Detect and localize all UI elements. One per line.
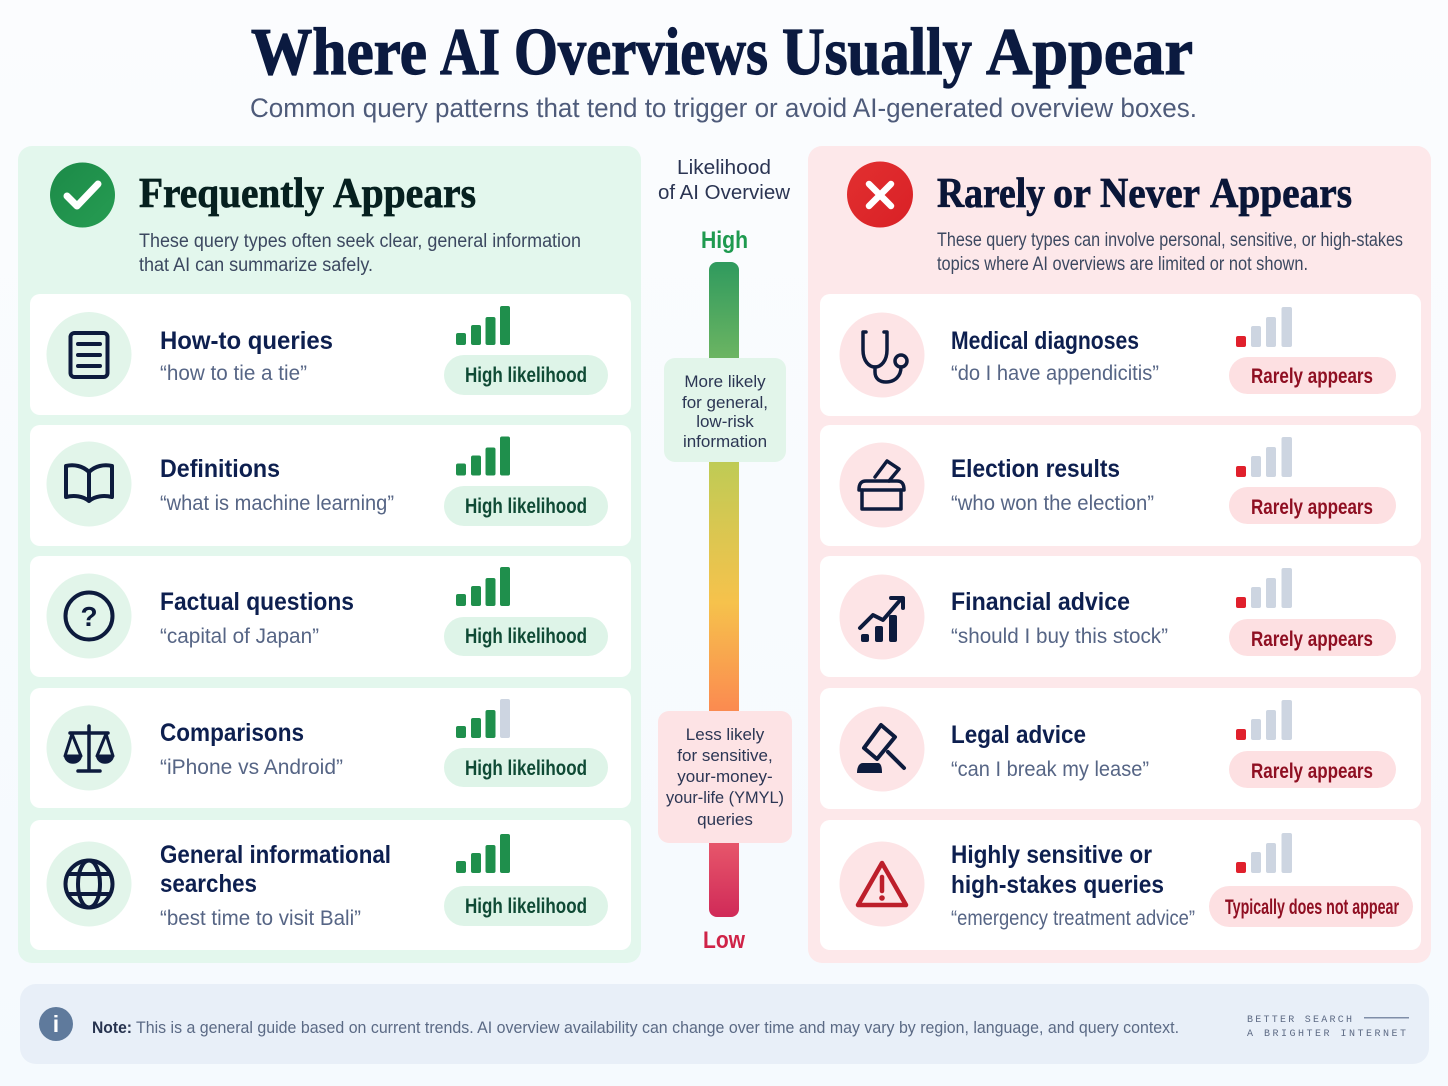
callout: more likely <box>664 358 786 462</box>
likelihood pill <box>1229 487 1396 524</box>
query title: Factual questions <box>160 588 354 616</box>
icon: warning triangle <box>858 863 906 905</box>
panel description: that AI can summarize safely. <box>139 255 373 276</box>
likelihood pill: High likelihood <box>465 625 587 648</box>
signal bars <box>456 834 510 873</box>
icon: open book <box>66 465 112 501</box>
likelihood pill <box>444 355 608 395</box>
card: medical diagnoses <box>820 294 1421 416</box>
panel heading: or <box>1053 171 1091 217</box>
query title <box>951 841 1164 899</box>
query example: “capital of Japan” <box>160 625 319 648</box>
likelihood pill <box>1209 886 1413 927</box>
note text: Note: <box>92 1018 132 1037</box>
card: legal advice <box>820 688 1421 809</box>
query title: Comparisons <box>160 719 304 747</box>
icon: info: i <box>53 1011 59 1037</box>
query title: Medical diagnoses <box>951 327 1139 355</box>
title: Usually <box>782 15 972 89</box>
panel heading: Frequently <box>139 171 324 217</box>
note text: This is a general guide based on current trends. AI overview availability can change over time and may vary by region, language, and query context. <box>136 1018 1179 1037</box>
panel: rarely or never appears <box>808 146 1431 963</box>
query example: “best time to visit Bali” <box>160 907 361 930</box>
icon: gavel <box>857 725 904 773</box>
query example: “do I have appendicitis” <box>951 362 1159 385</box>
icon: globe <box>66 860 112 908</box>
brand mark: A BRIGHTER INTERNET <box>1247 1029 1406 1040</box>
card: financial advice <box>820 556 1421 677</box>
callout: less likely <box>658 711 792 843</box>
query title: searches <box>160 870 257 898</box>
card: highly sensitive queries <box>820 820 1421 950</box>
callout: more likely: More likely <box>684 372 766 391</box>
title: Appear <box>986 15 1193 89</box>
query title: Definitions <box>160 455 280 483</box>
panel heading: Appears <box>1210 171 1352 217</box>
icon: info <box>39 1007 73 1041</box>
brand mark: BETTER SEARCH <box>1247 1015 1352 1026</box>
likelihood pill: Rarely appears <box>1251 496 1373 519</box>
subtitle: Common query patterns that tend to trigger or avoid AI-generated overview boxes. <box>250 93 1197 123</box>
footer note bar <box>20 984 1429 1064</box>
callout: more likely: for general, <box>682 393 768 412</box>
query title: General informational <box>160 841 391 869</box>
signal bars <box>456 306 510 345</box>
card: definitions <box>30 425 631 546</box>
callout: less likely: queries <box>697 810 753 829</box>
likelihood pill <box>444 486 608 526</box>
query title: high-stakes queries <box>951 871 1164 899</box>
scale heading: Likelihood <box>677 157 771 179</box>
icon: ballot box <box>859 461 904 509</box>
signal bars <box>1236 700 1292 740</box>
likelihood pill: Rarely appears <box>1251 760 1373 783</box>
query example: “who won the election” <box>951 492 1154 515</box>
title: AI <box>440 15 500 89</box>
likelihood pill <box>444 617 608 656</box>
card: general informational searches <box>30 820 631 950</box>
panel heading: Appears <box>333 171 476 217</box>
likelihood pill: Rarely appears <box>1251 365 1373 388</box>
callout: less likely: your-money- <box>677 767 773 786</box>
signal bars <box>456 699 510 738</box>
icon: question mark: ? <box>80 601 98 632</box>
query title: How-to queries <box>160 327 333 355</box>
icon: rising chart <box>860 598 903 642</box>
panel description <box>139 231 581 276</box>
icon: stethoscope <box>863 332 907 382</box>
scale heading <box>658 157 791 204</box>
title: Overviews <box>514 15 768 89</box>
likelihood pill <box>1229 751 1396 788</box>
icon: green check badge <box>50 162 115 228</box>
callout: less likely: Less likely <box>686 725 765 744</box>
signal bars <box>1236 833 1292 873</box>
panel: frequently appears <box>18 146 641 963</box>
callout: more likely: low-risk <box>696 412 754 431</box>
callout: less likely: your-life (YMYL) <box>666 788 784 807</box>
likelihood scale <box>658 157 792 954</box>
query title <box>160 841 391 898</box>
low label: Low <box>703 927 745 954</box>
likelihood pill: High likelihood <box>465 895 587 918</box>
panel heading: Never <box>1100 171 1200 217</box>
gradient bar <box>709 262 739 917</box>
query title: Election results <box>951 455 1120 483</box>
card: comparisons <box>30 688 631 808</box>
query example: “should I buy this stock” <box>951 625 1168 648</box>
card: factual questions <box>30 556 631 677</box>
high label: High <box>701 227 748 254</box>
signal bars <box>1236 307 1292 347</box>
likelihood pill <box>444 886 608 926</box>
likelihood pill: High likelihood <box>465 495 587 518</box>
title: Where <box>251 15 427 89</box>
icon: red cross badge <box>847 162 913 228</box>
scale heading: of AI Overview <box>658 182 791 204</box>
callout: less likely: for sensitive, <box>677 746 773 765</box>
signal bars <box>1236 437 1292 477</box>
brand mark <box>1247 1015 1409 1040</box>
query title: Highly sensitive or <box>951 841 1152 869</box>
card: how-to queries <box>30 294 631 415</box>
query title: Legal advice <box>951 721 1086 749</box>
icon: question mark <box>66 592 112 640</box>
query example: “what is machine learning” <box>160 492 394 515</box>
likelihood pill <box>1229 619 1396 656</box>
icon: document <box>70 333 108 377</box>
panel description <box>937 230 1403 275</box>
query example: “iPhone vs Android” <box>160 756 343 779</box>
likelihood pill <box>444 748 608 787</box>
signal bars <box>1236 568 1292 608</box>
likelihood pill <box>1229 357 1396 394</box>
likelihood pill: Rarely appears <box>1251 628 1373 651</box>
query title: Financial advice <box>951 588 1130 616</box>
panel heading: Rarely <box>937 171 1045 217</box>
signal bars <box>456 436 510 476</box>
panel description: topics where AI overviews are limited or not shown. <box>937 254 1308 275</box>
query example: “can I break my lease” <box>951 758 1149 781</box>
likelihood pill: High likelihood <box>465 364 587 387</box>
query example: “emergency treatment advice” <box>951 907 1195 930</box>
card: election results <box>820 425 1421 546</box>
likelihood pill: High likelihood <box>465 757 587 780</box>
panel description: These query types often seek clear, general information <box>139 231 581 252</box>
icon: balance scale <box>65 726 113 771</box>
query example: “how to tie a tie” <box>160 362 307 385</box>
signal bars <box>456 567 510 606</box>
callout: more likely: information <box>683 432 767 451</box>
